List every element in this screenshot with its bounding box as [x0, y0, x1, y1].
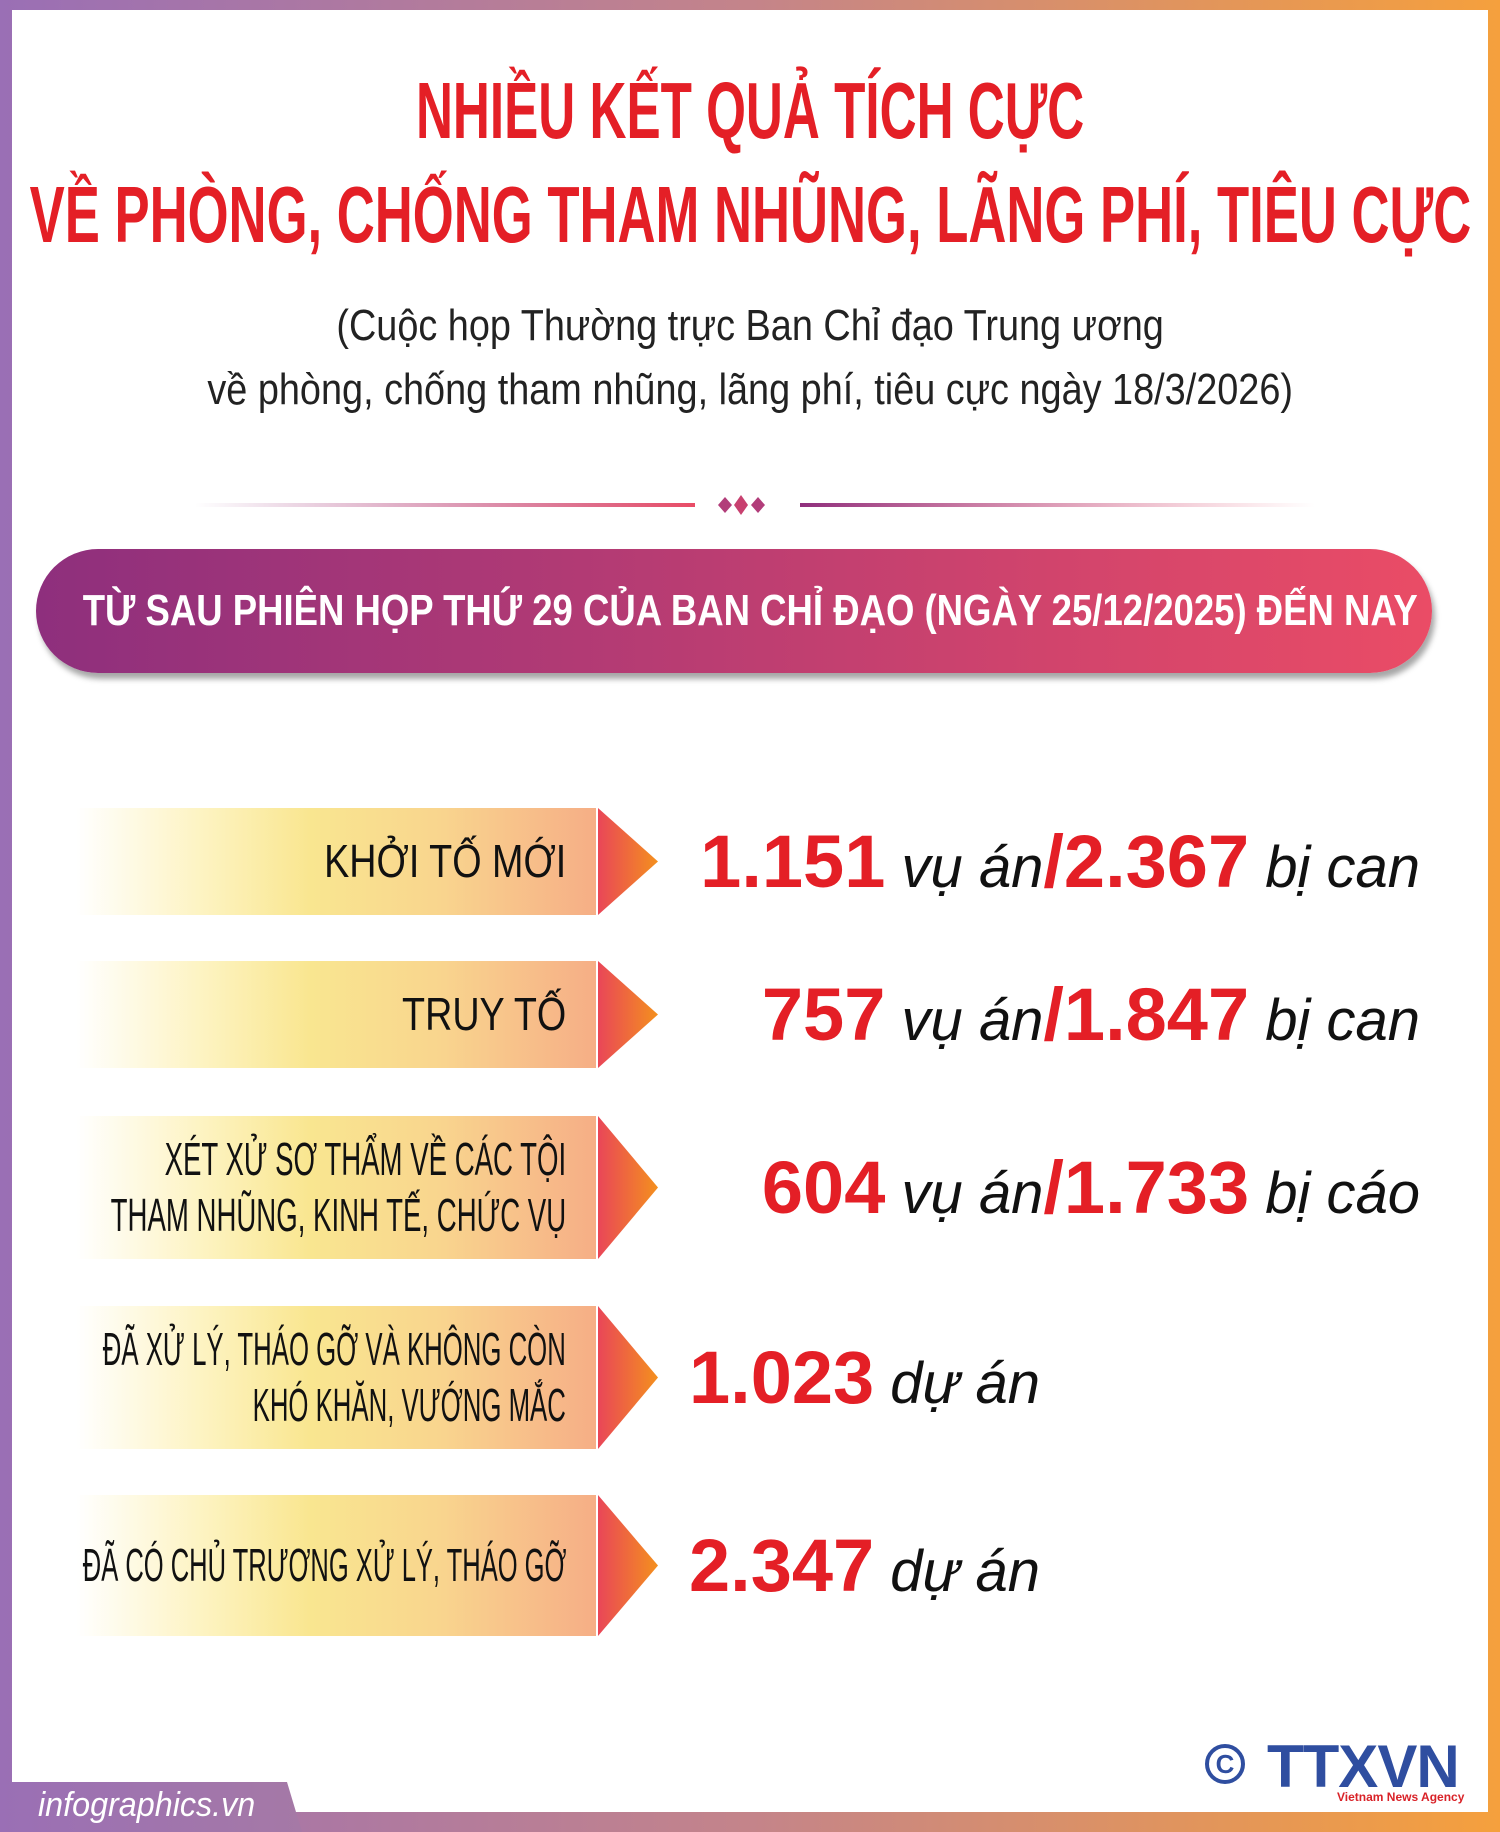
row 1: 1.151 vụ án/2.367 bị can — [700, 820, 1420, 903]
row 1 — [93, 808, 1420, 915]
row 5: ĐÃ CÓ CHỦ TRƯƠNG XỬ LÝ, THÁO GỠ — [82, 1539, 566, 1591]
row 3: XÉT XỬ SƠ THẨM VỀ CÁC TỘI — [164, 1133, 566, 1185]
subtitle: về phòng, chống tham nhũng, lãng phí, tiêu cực ngày 18/3/2026) — [207, 365, 1293, 414]
banner: TỪ SAU PHIÊN HỌP THỨ 29 CỦA BAN CHỈ ĐẠO (NGÀY 25/12/2025) ĐẾN NAY — [82, 586, 1418, 635]
logo: TTXVN: C — [1216, 1749, 1234, 1779]
logo: TTXVN — [1205, 1733, 1464, 1804]
row 2 — [93, 961, 1420, 1068]
subtitle: (Cuộc họp Thường trực Ban Chỉ đạo Trung ương — [336, 301, 1164, 350]
row 4 — [93, 1306, 1040, 1449]
row 2: TRUY TỐ — [402, 988, 566, 1040]
divider — [215, 495, 1292, 515]
row 3: THAM NHŨNG, KINH TẾ, CHỨC VỤ — [111, 1188, 566, 1240]
row 5 — [82, 1495, 1040, 1636]
footer tab — [12, 1782, 296, 1812]
row 5: 2.347 dự án — [689, 1524, 1040, 1607]
row 4: ĐÃ XỬ LÝ, THÁO GỠ VÀ KHÔNG CÒN — [103, 1323, 566, 1375]
row 4: 1.023 dự án — [689, 1336, 1040, 1419]
title: VỀ PHÒNG, CHỐNG THAM NHŨNG, LÃNG PHÍ, TIÊU CỰC — [29, 170, 1471, 259]
row 4: KHÓ KHĂN, VƯỚNG MẮC — [253, 1378, 566, 1430]
title: NHIỀU KẾT QUẢ TÍCH CỰC — [416, 66, 1084, 155]
row 3: 604 vụ án/1.733 bị cáo — [762, 1146, 1420, 1229]
logo: TTXVN: TTXVN — [1267, 1733, 1459, 1800]
footer text: infographics.vn — [38, 1786, 255, 1824]
logo: TTXVN: Vietnam News Agency — [1337, 1790, 1464, 1804]
title — [29, 66, 1471, 259]
row 3 — [93, 1116, 1420, 1259]
banner — [36, 549, 1432, 673]
subtitle — [207, 301, 1293, 414]
row 1: KHỞI TỐ MỚI — [324, 835, 566, 887]
row 2: 757 vụ án/1.847 bị can — [762, 973, 1420, 1056]
